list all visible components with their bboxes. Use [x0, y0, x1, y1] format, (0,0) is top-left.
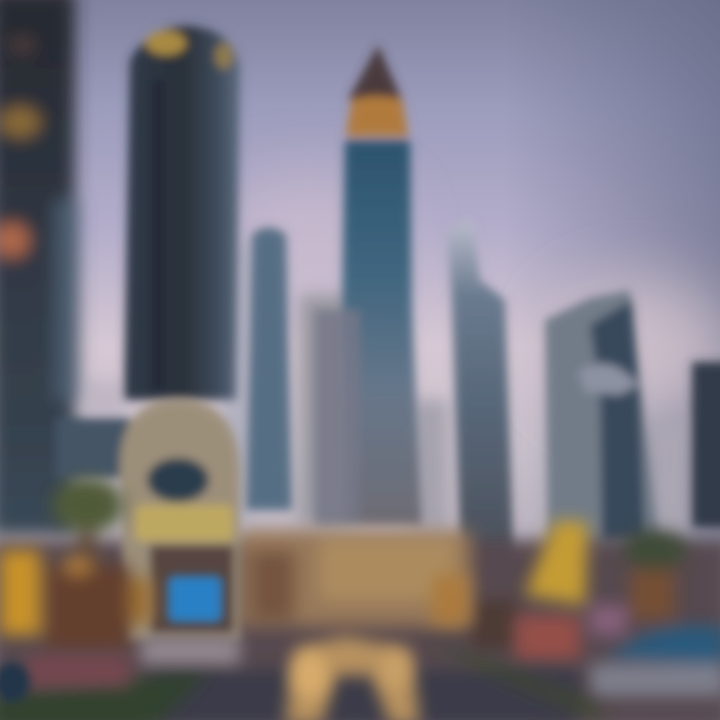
colourful pavilion right	[515, 520, 720, 696]
tower: tall dark with gold crown	[124, 26, 240, 400]
low dome building left	[55, 398, 240, 640]
tower: slim mid blue	[246, 228, 292, 510]
road with light trails	[0, 636, 610, 720]
distant towers	[85, 240, 690, 540]
tower: left foreground	[0, 0, 79, 535]
tower: right slim grey-blue	[447, 220, 515, 600]
yellow and orange shopfronts left	[0, 550, 468, 650]
palm tree left	[52, 477, 124, 610]
tower: far right dark	[692, 362, 720, 527]
blue screen	[168, 576, 222, 622]
street-level ground	[0, 530, 720, 720]
tower: central blue with orange crown	[315, 45, 422, 525]
tower: right cluster	[545, 290, 660, 550]
